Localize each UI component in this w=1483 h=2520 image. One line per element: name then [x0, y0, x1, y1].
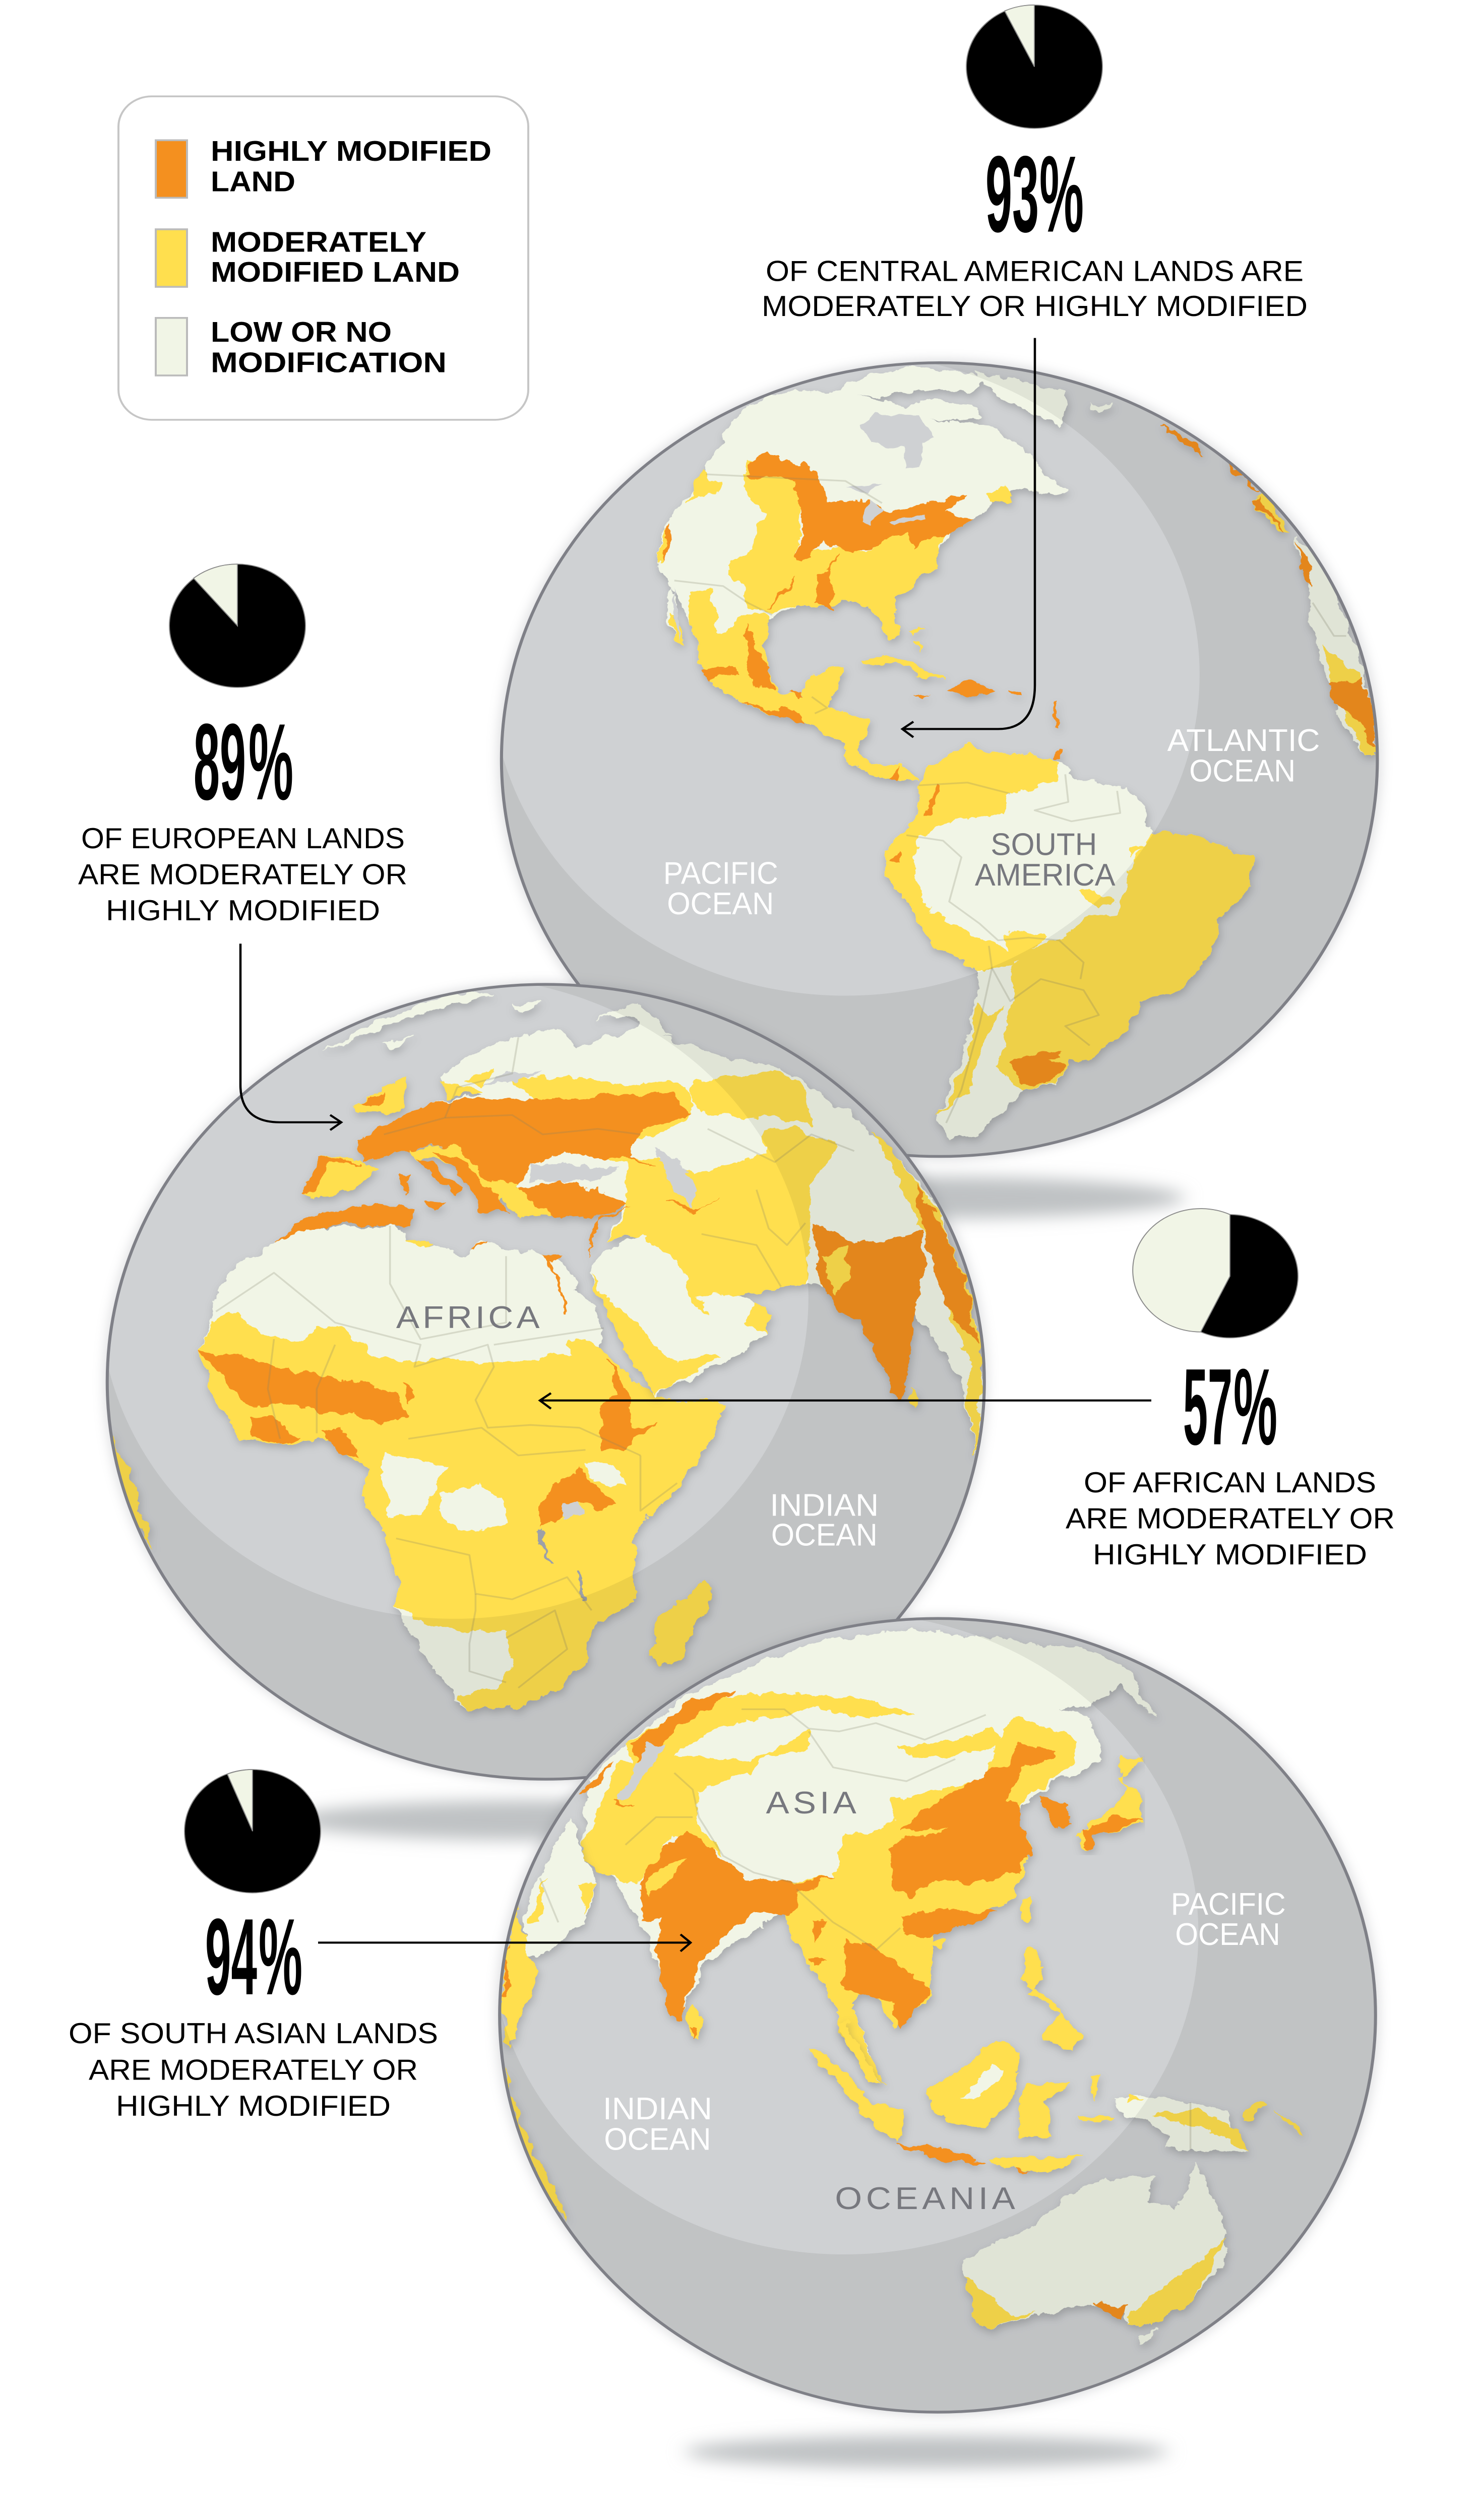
caption: Central America — [762, 255, 1308, 322]
legend item: moderately modified land: MODERATELY — [211, 226, 426, 258]
legend — [118, 96, 528, 420]
inland water: Hudson Bay and Great Lakes — [673, 414, 934, 644]
pie: 93% — [966, 5, 1102, 129]
arrow: Europe — [240, 943, 341, 1130]
shade outside highlight — [479, 343, 1437, 1211]
land: Africa — [109, 1207, 723, 1710]
number: 94%: 94 — [205, 1896, 257, 2018]
number: 89%: 89 — [194, 701, 246, 823]
caption: Africa: OF AFRICAN LANDS — [1084, 1467, 1376, 1498]
shade outside highlight — [479, 1612, 1437, 2480]
label: Indian Ocean: INDIAN — [603, 2091, 712, 2126]
arrow: Africa — [540, 1393, 1151, 1409]
pie: 94% — [184, 1770, 321, 1893]
label: Indian Ocean — [770, 1487, 879, 1552]
label: South America — [975, 827, 1116, 892]
land: Arabia and Africa rim — [500, 1817, 595, 2219]
legend item: low or no modification: MODIFICATION — [211, 346, 447, 379]
caption: Central America: MODERATELY OR HIGHLY MODIFIED — [762, 290, 1308, 322]
label: Indian Ocean: OCEAN — [771, 1517, 878, 1552]
land: Europe and Africa rim — [1163, 425, 1377, 755]
land: Asia — [580, 1629, 1154, 2083]
caption: Europe: HIGHLY MODIFIED — [106, 895, 380, 927]
legend item: moderately modified land — [156, 226, 460, 288]
legend item: highly modified land — [156, 135, 491, 198]
caption: Africa: ARE MODERATELY OR — [1066, 1502, 1395, 1535]
arrow: South Asia — [318, 1934, 691, 1951]
number: 93%: 93 — [985, 134, 1039, 255]
pie: 57% — [1133, 1209, 1298, 1338]
country borders — [216, 1038, 854, 1688]
label: Atlantic Ocean: OCEAN — [1189, 753, 1295, 788]
caption: Europe: ARE MODERATELY OR — [78, 858, 407, 891]
label: South America: AMERICA — [975, 857, 1116, 892]
shadow under Americas globe — [681, 1177, 1185, 1219]
label: Africa: AFRICA — [396, 1299, 540, 1335]
stat: South Asia 94% — [69, 1770, 438, 2122]
caption: Europe: OF EUROPEAN LANDS — [81, 823, 405, 854]
stat: Europe 89% — [78, 564, 407, 927]
label: South America: SOUTH — [991, 827, 1097, 862]
stat: Central America 93%: % — [1039, 134, 1084, 255]
arrow: Central America — [902, 338, 1035, 737]
globe: Asia and Oceania — [479, 1612, 1437, 2480]
land: Eurasia — [301, 991, 985, 1456]
caption: South Asia: ARE MODERATELY OR — [89, 2054, 418, 2086]
legend item: highly modified land: HIGHLY MODIFIED — [211, 135, 491, 167]
label: Oceania: OCEANIA — [835, 2180, 1015, 2216]
land: South America — [885, 744, 1252, 1140]
label: Pacific Ocean: PACIFIC — [663, 855, 778, 891]
land: Southeast Asia islands — [809, 1950, 1304, 2173]
legend item: low or no modification: LOW OR NO — [211, 316, 392, 348]
land: Japan — [1074, 1756, 1142, 1850]
caption: Europe — [78, 823, 407, 927]
label: Indian Ocean: OCEAN — [604, 2121, 711, 2157]
land: Australia — [964, 2163, 1227, 2346]
caption: Central America: OF CENTRAL AMERICAN LANDS ARE — [766, 255, 1304, 287]
stat: Africa 57%: % — [1233, 1346, 1277, 1468]
globe: Europe and Africa — [91, 968, 1048, 1836]
shadow under Asia globe — [685, 2435, 1168, 2469]
caption: Africa — [1066, 1467, 1395, 1570]
legend item: highly modified land: LAND — [211, 165, 295, 198]
caption: South Asia: HIGHLY MODIFIED — [116, 2090, 391, 2122]
number: 57%: 57 — [1183, 1346, 1232, 1468]
label: Indian Ocean: INDIAN — [770, 1487, 879, 1523]
label: Pacific Ocean: OCEAN — [667, 886, 774, 921]
label: Indian Ocean — [603, 2091, 712, 2157]
label: Asia: ASIA — [766, 1785, 856, 1820]
pie: 89% — [169, 564, 305, 687]
land: North America — [657, 367, 1113, 781]
shade outside highlight — [91, 968, 1048, 1836]
legend item: moderately modified land: MODIFIED LAND — [211, 256, 460, 288]
country borders — [674, 474, 1346, 1123]
label: Atlantic Ocean: ATLANTIC — [1167, 722, 1320, 758]
stat: Europe 89%: % — [249, 701, 293, 823]
stat: South Asia 94%: % — [259, 1896, 302, 2018]
caption: Africa: HIGHLY MODIFIED — [1093, 1539, 1367, 1570]
stat: Africa 57% — [1066, 1209, 1395, 1570]
caption: South Asia: OF SOUTH ASIAN LANDS — [69, 2018, 438, 2049]
country borders — [540, 1709, 1191, 2149]
label: Pacific Ocean — [663, 855, 778, 921]
shadow under Africa globe — [292, 1800, 786, 1840]
globe: Americas — [494, 356, 1385, 1163]
legend item: low or no modification — [156, 316, 447, 379]
label: Pacific Ocean — [1171, 1886, 1286, 1951]
label: Atlantic Ocean — [1167, 722, 1320, 788]
stat: Central America 93% — [762, 5, 1308, 322]
label: Pacific Ocean: PACIFIC — [1171, 1886, 1286, 1921]
label: Pacific Ocean: OCEAN — [1175, 1916, 1280, 1951]
caption: South Asia — [69, 2018, 438, 2122]
